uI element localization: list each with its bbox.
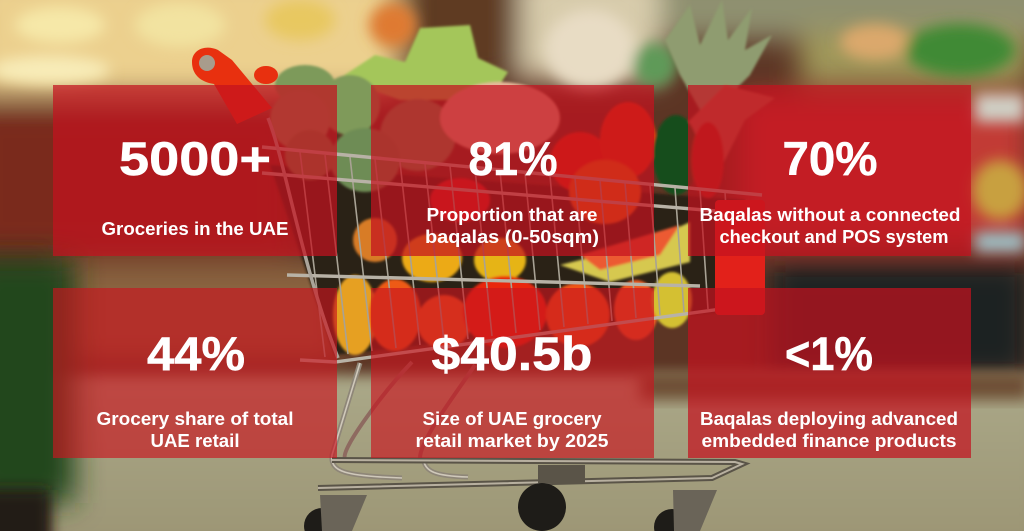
- label: baqalas without connected checkout: Baqalas without a connected: [700, 204, 960, 225]
- label: groceries in the UAE: Groceries in the UAE: [102, 218, 288, 239]
- panel: $40.5b market size: [371, 288, 654, 458]
- panel: 70% without POS: [688, 85, 971, 256]
- label: grocery share of total UAE retail: [96, 408, 294, 451]
- cart undercarriage: [332, 363, 468, 478]
- label: size of UAE grocery retail market: retail market by 2025: [416, 430, 608, 451]
- shopping cart full of produce: [192, 0, 775, 531]
- cart rims: [262, 147, 762, 362]
- number: $40.5b: $40.5b: [432, 327, 592, 380]
- produce: [270, 0, 775, 355]
- cart pole: [268, 118, 338, 358]
- panel: 81% baqalas: [371, 85, 654, 256]
- label: proportion that are baqalas: [425, 204, 599, 247]
- label: size of UAE grocery retail market: Size of UAE grocery: [422, 408, 602, 429]
- label: baqalas deploying embedded finance: embedded finance products: [702, 430, 956, 451]
- number: 44%: 44%: [147, 327, 245, 380]
- cart red handle: [192, 48, 272, 124]
- panel: 44% grocery share: [53, 288, 337, 458]
- panel: 5000+ groceries: [53, 85, 337, 256]
- number: 5000+: 5000+: [119, 132, 271, 185]
- number: 81%: 81%: [468, 132, 558, 185]
- label: proportion that are baqalas: Proportion that are: [426, 204, 598, 225]
- label: size of UAE grocery retail market: [416, 408, 608, 451]
- cart red side clip: [715, 200, 765, 315]
- panel: <1% embedded finance: [688, 288, 971, 458]
- label: baqalas deploying embedded finance: [700, 408, 958, 451]
- cart wheels: [304, 508, 340, 531]
- label: baqalas deploying embedded finance: Baqalas deploying advanced: [700, 408, 958, 429]
- number: <1%: <1%: [785, 327, 873, 380]
- label: grocery share of total UAE retail: UAE retail: [150, 430, 240, 451]
- cart wire mesh: [300, 152, 732, 357]
- label: grocery share of total UAE retail: Grocery share of total: [96, 408, 294, 429]
- label: baqalas without connected checkout: checkout and POS system: [720, 226, 948, 247]
- label: proportion that are baqalas: baqalas (0-50sqm): [425, 226, 599, 247]
- number: 70%: 70%: [782, 132, 878, 185]
- label: baqalas without connected checkout: [700, 204, 960, 247]
- cart interior: [270, 165, 745, 355]
